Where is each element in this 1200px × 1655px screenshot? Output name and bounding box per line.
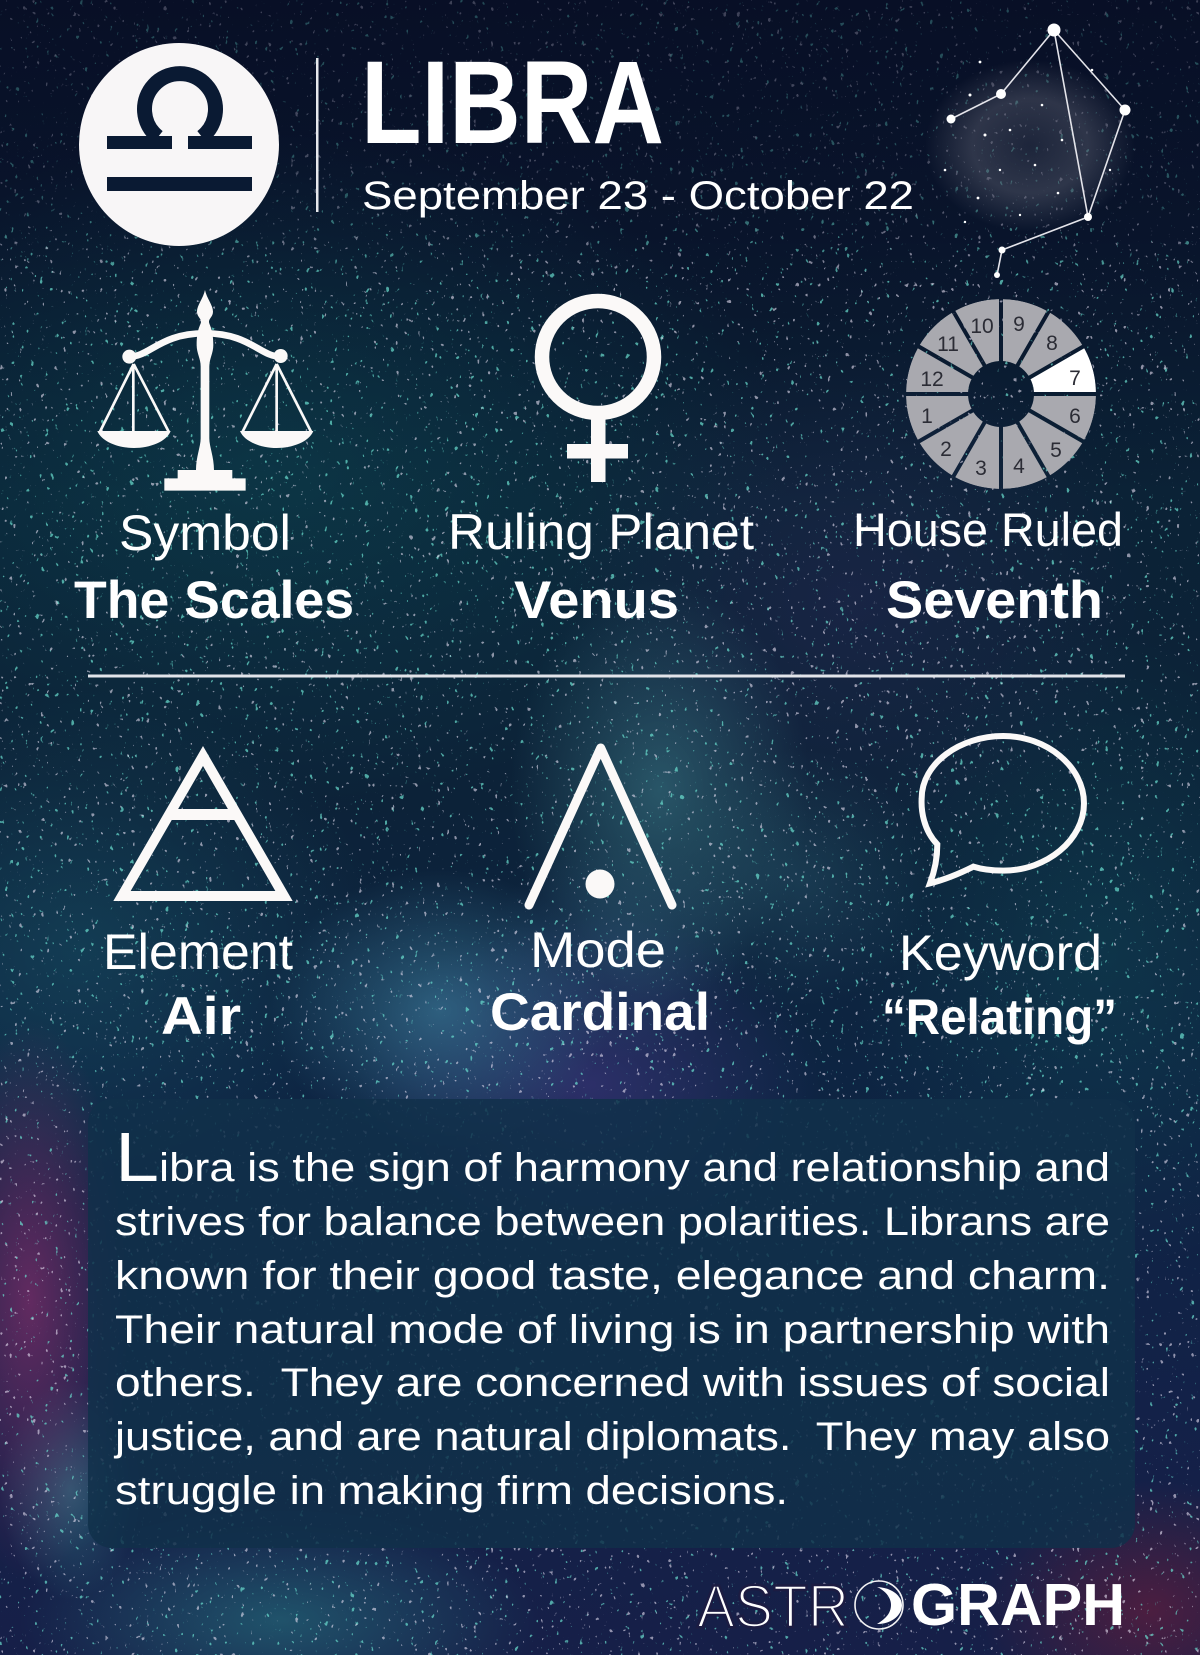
value: seventh: Seventh (886, 571, 1103, 630)
constellation (925, 24, 1135, 278)
section divider (88, 674, 1125, 678)
icon: house wheel (906, 299, 1096, 489)
description text (114, 1118, 1110, 1513)
label: mode: Mode (530, 922, 666, 978)
title divider (316, 58, 318, 212)
description text: known for their good taste, elegance and charm. (115, 1254, 1110, 1298)
value: venus: Venus (514, 571, 679, 630)
value: cardinal: Cardinal (490, 983, 710, 1042)
icon: house wheel: 9 (1013, 313, 1025, 336)
icon: house wheel: 12 (920, 368, 944, 391)
title: Libra: LIBRA (361, 37, 664, 169)
description text: strives for balance between polarities. Librans are (115, 1200, 1110, 1244)
icon: house wheel: 1 (921, 405, 933, 428)
icon: house wheel: 5 (1050, 439, 1062, 462)
logo: astrograph: ASTR (697, 1573, 849, 1640)
description text: others. They are concerned with issues of social (115, 1361, 1110, 1405)
icon: speech bubble (922, 736, 1084, 883)
value: the scales: The Scales (74, 571, 354, 630)
icon: air triangle (122, 756, 284, 896)
icon: house wheel: 3 (975, 457, 987, 480)
icon: house wheel: 4 (1013, 455, 1025, 478)
icon: house wheel: 10 (970, 315, 994, 338)
icon: house wheel: 6 (1069, 405, 1081, 428)
label: ruling planet: Ruling Planet (448, 504, 754, 560)
value: relating: “Relating” (882, 989, 1117, 1045)
label: symbol: Symbol (119, 505, 291, 561)
icon: house wheel: 8 (1046, 332, 1058, 355)
logo: astrograph (697, 1572, 1125, 1640)
description text: justice, and are natural diplomats. They may also (114, 1415, 1110, 1459)
zodiac glyph badge (79, 43, 279, 246)
date range: September 23 - October 22 (362, 174, 914, 218)
icon: house wheel: 11 (937, 333, 959, 356)
description text: Their natural mode of living is in partnership with (115, 1308, 1110, 1352)
label: keyword: Keyword (899, 925, 1102, 981)
label: house ruled: House Ruled (853, 503, 1123, 556)
icon: scales (97, 290, 313, 491)
description text: struggle in making firm decisions. (115, 1469, 788, 1513)
panel: description (88, 1099, 1135, 1548)
value: air: Air (161, 987, 241, 1046)
icon: venus (542, 301, 654, 482)
icon: cardinal mode (529, 748, 672, 905)
icon: house wheel: 2 (940, 438, 952, 461)
icon: house wheel: 7 (1069, 367, 1081, 390)
description text: Libra is the sign of harmony and relationship and (115, 1118, 1110, 1196)
logo: astrograph: GRAPH (911, 1572, 1125, 1638)
label: element: Element (103, 924, 293, 980)
